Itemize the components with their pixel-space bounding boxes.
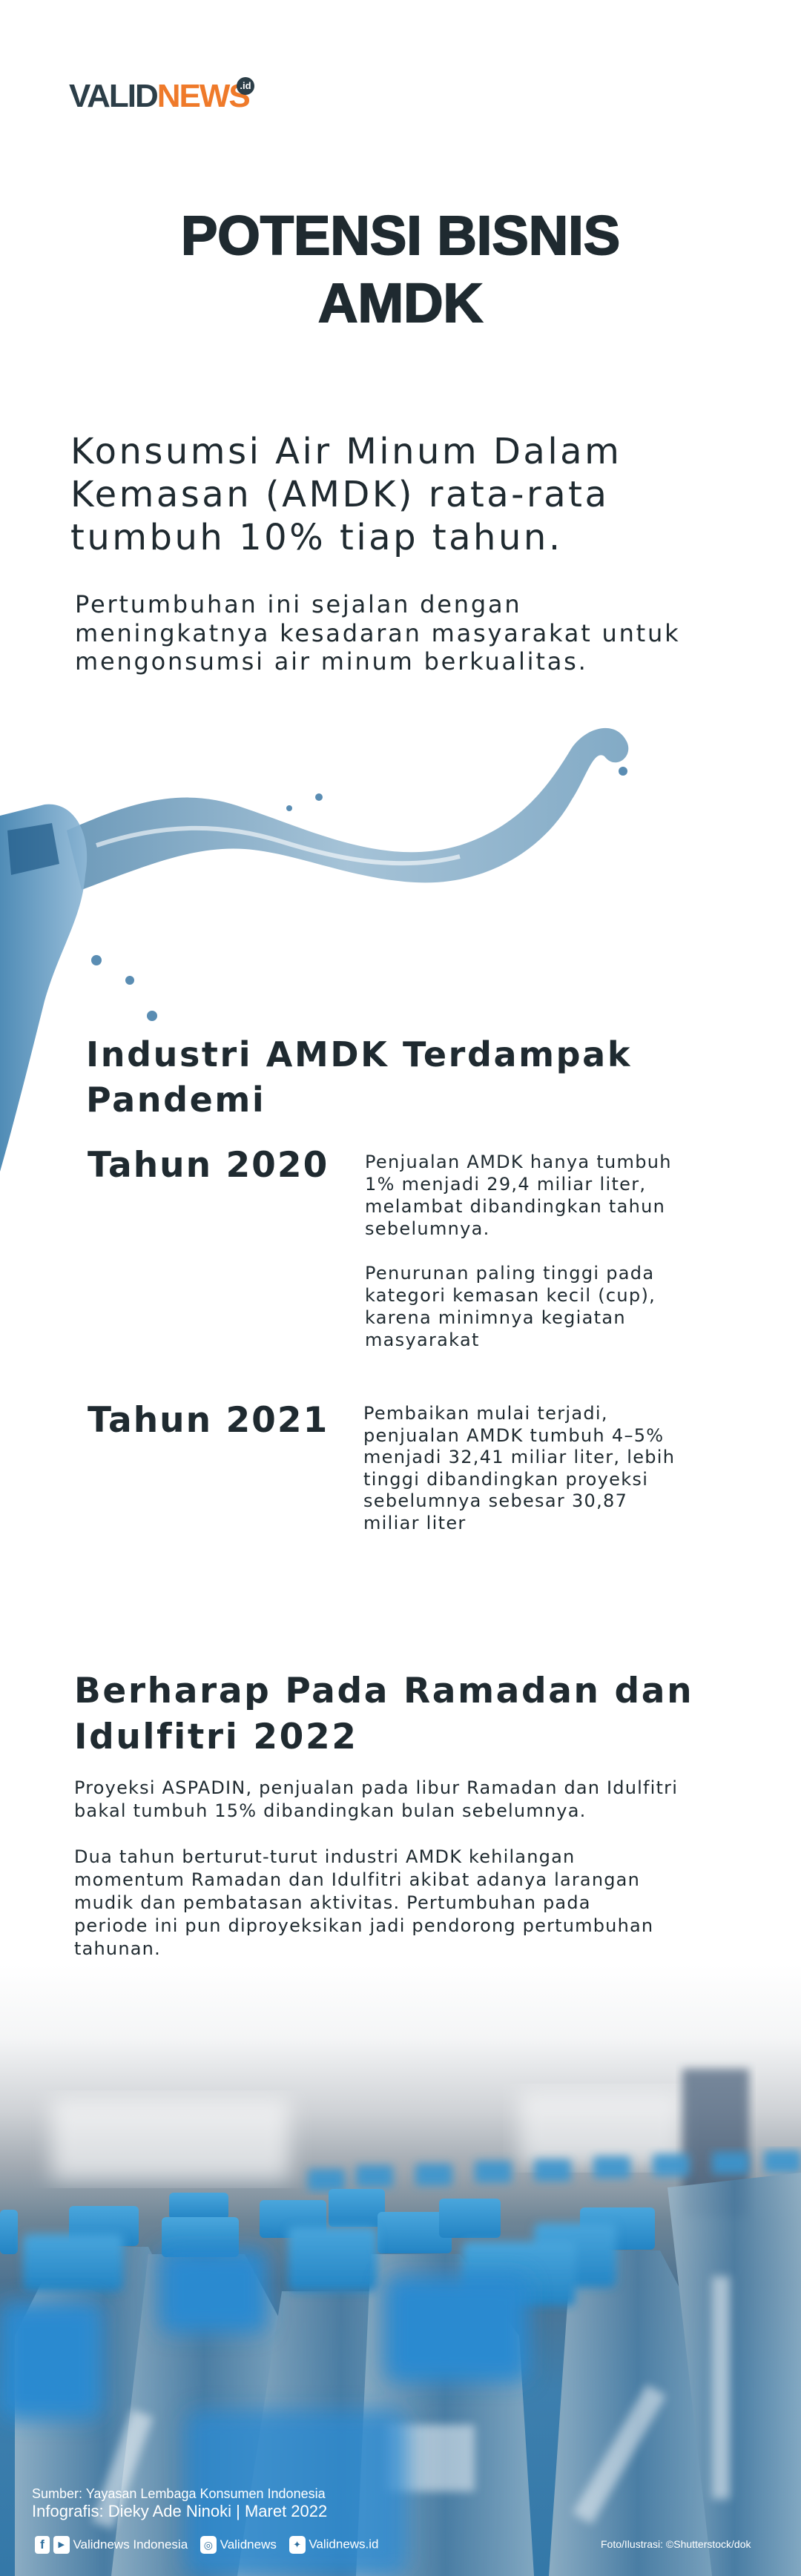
- ramadan paragraphs: Proyeksi ASPADIN, penjualan pada libur Ramadan dan Idulfitri: [74, 1777, 678, 1798]
- block: tahun 2020: [88, 1145, 672, 1350]
- text 2020: [365, 1152, 672, 1350]
- subtitle: tumbuh 10% tiap tahun.: [70, 517, 563, 558]
- ramadan paragraphs: periode ini pun diproyeksikan jadi pendorong pertumbuhan: [74, 1915, 653, 1936]
- icon: twitter: [289, 2536, 306, 2554]
- text 2020: sebelumnya.: [365, 1218, 490, 1239]
- text 2021: sebelumnya sebesar 30,87: [363, 1490, 627, 1511]
- ramadan paragraphs: tahunan.: [74, 1938, 161, 1959]
- year label 2021: Tahun 2021: [88, 1400, 329, 1441]
- section heading: ramadan: Berharap Pada Ramadan dan: [74, 1671, 693, 1711]
- footer credits: Sumber: Yayasan Lembaga Konsumen Indonesia: [32, 2486, 326, 2501]
- icon: instagram: ◎: [204, 2539, 213, 2551]
- icon: facebook: [35, 2536, 50, 2554]
- subtitle: Kemasan (AMDK) rata-rata: [70, 474, 609, 515]
- stream: [67, 728, 628, 890]
- footer credits: Infografis: Dieky Ade Ninoki | Maret 2022: [32, 2502, 327, 2520]
- intro paragraph: meningkatnya kesadaran masyarakat untuk: [75, 618, 680, 647]
- photo credit: Foto/Ilustrasi: ©Shutterstock/dok: [601, 2538, 751, 2550]
- title: [181, 205, 620, 334]
- text 2020: 1% menjadi 29,4 miliar liter,: [365, 1174, 646, 1195]
- text 2020: masyarakat: [365, 1330, 480, 1350]
- icon: youtube: ▶: [58, 2540, 65, 2549]
- droplets: [91, 955, 102, 965]
- text 2021: [363, 1403, 675, 1533]
- text 2020: Penjualan AMDK hanya tumbuh: [365, 1152, 672, 1172]
- icon: youtube: [53, 2536, 70, 2554]
- text 2021: Pembaikan mulai terjadi,: [363, 1403, 608, 1424]
- icon: facebook: f: [40, 2537, 44, 2552]
- text 2020: karena minimnya kegiatan: [365, 1307, 626, 1328]
- section heading: pandemic: Pandemi: [86, 1080, 266, 1120]
- illustration: water splash from bottle: [0, 728, 629, 1172]
- intro paragraph: Pertumbuhan ini sejalan dengan: [75, 590, 521, 618]
- text 2021: penjualan AMDK tumbuh 4–5%: [363, 1425, 664, 1446]
- ramadan paragraphs: mudik dan pembatasan aktivitas. Pertumbuhan pada: [74, 1892, 591, 1913]
- section heading: pandemic: [86, 1034, 632, 1120]
- subtitle: [70, 431, 622, 558]
- photo: bottles on production line: [0, 2019, 801, 2576]
- title: AMDK: [318, 272, 483, 334]
- footer credits: [32, 2486, 327, 2520]
- bottle bodies: [15, 2173, 801, 2576]
- block: tahun 2021: [88, 1400, 675, 1533]
- caps: [0, 2189, 655, 2257]
- section heading: ramadan: [74, 1671, 693, 1757]
- text 2021: tinggi dibandingkan proyeksi: [363, 1469, 648, 1490]
- ramadan paragraphs: momentum Ramadan dan Idulfitri akibat adanya larangan: [74, 1869, 640, 1890]
- section heading: ramadan: Idulfitri 2022: [74, 1717, 358, 1757]
- footer social icons: Validnews Indonesia Validnews Validnews.id: [73, 2537, 379, 2552]
- text 2020: melambat dibandingkan tahun: [365, 1196, 665, 1217]
- ramadan paragraphs: bakal tumbuh 15% dibandingkan bulan sebelumnya.: [74, 1800, 586, 1821]
- logo: VALIDNEWS: [69, 78, 249, 114]
- ramadan paragraphs: [74, 1777, 678, 1959]
- text 2020: kategori kemasan kecil (cup),: [365, 1285, 656, 1306]
- intro paragraph: [75, 590, 680, 676]
- text 2021: menjadi 32,41 miliar liter, lebih: [363, 1447, 675, 1467]
- section heading: pandemic: Industri AMDK Terdampak: [86, 1034, 632, 1074]
- text 2021: miliar liter: [363, 1513, 467, 1533]
- far small caps: [308, 2150, 801, 2191]
- subtitle: Konsumsi Air Minum Dalam: [70, 431, 622, 472]
- bottle: [0, 805, 87, 1172]
- year label 2020: Tahun 2020: [88, 1145, 329, 1186]
- icon: instagram: [200, 2536, 217, 2554]
- logo: .id: [240, 80, 251, 91]
- intro paragraph: mengonsumsi air minum berkualitas.: [75, 647, 588, 676]
- icon: twitter: ✦: [293, 2539, 301, 2550]
- title: POTENSI BISNIS: [181, 205, 620, 266]
- text 2020: Penurunan paling tinggi pada: [365, 1263, 654, 1284]
- ramadan paragraphs: Dua tahun berturut-turut industri AMDK kehilangan: [74, 1846, 575, 1867]
